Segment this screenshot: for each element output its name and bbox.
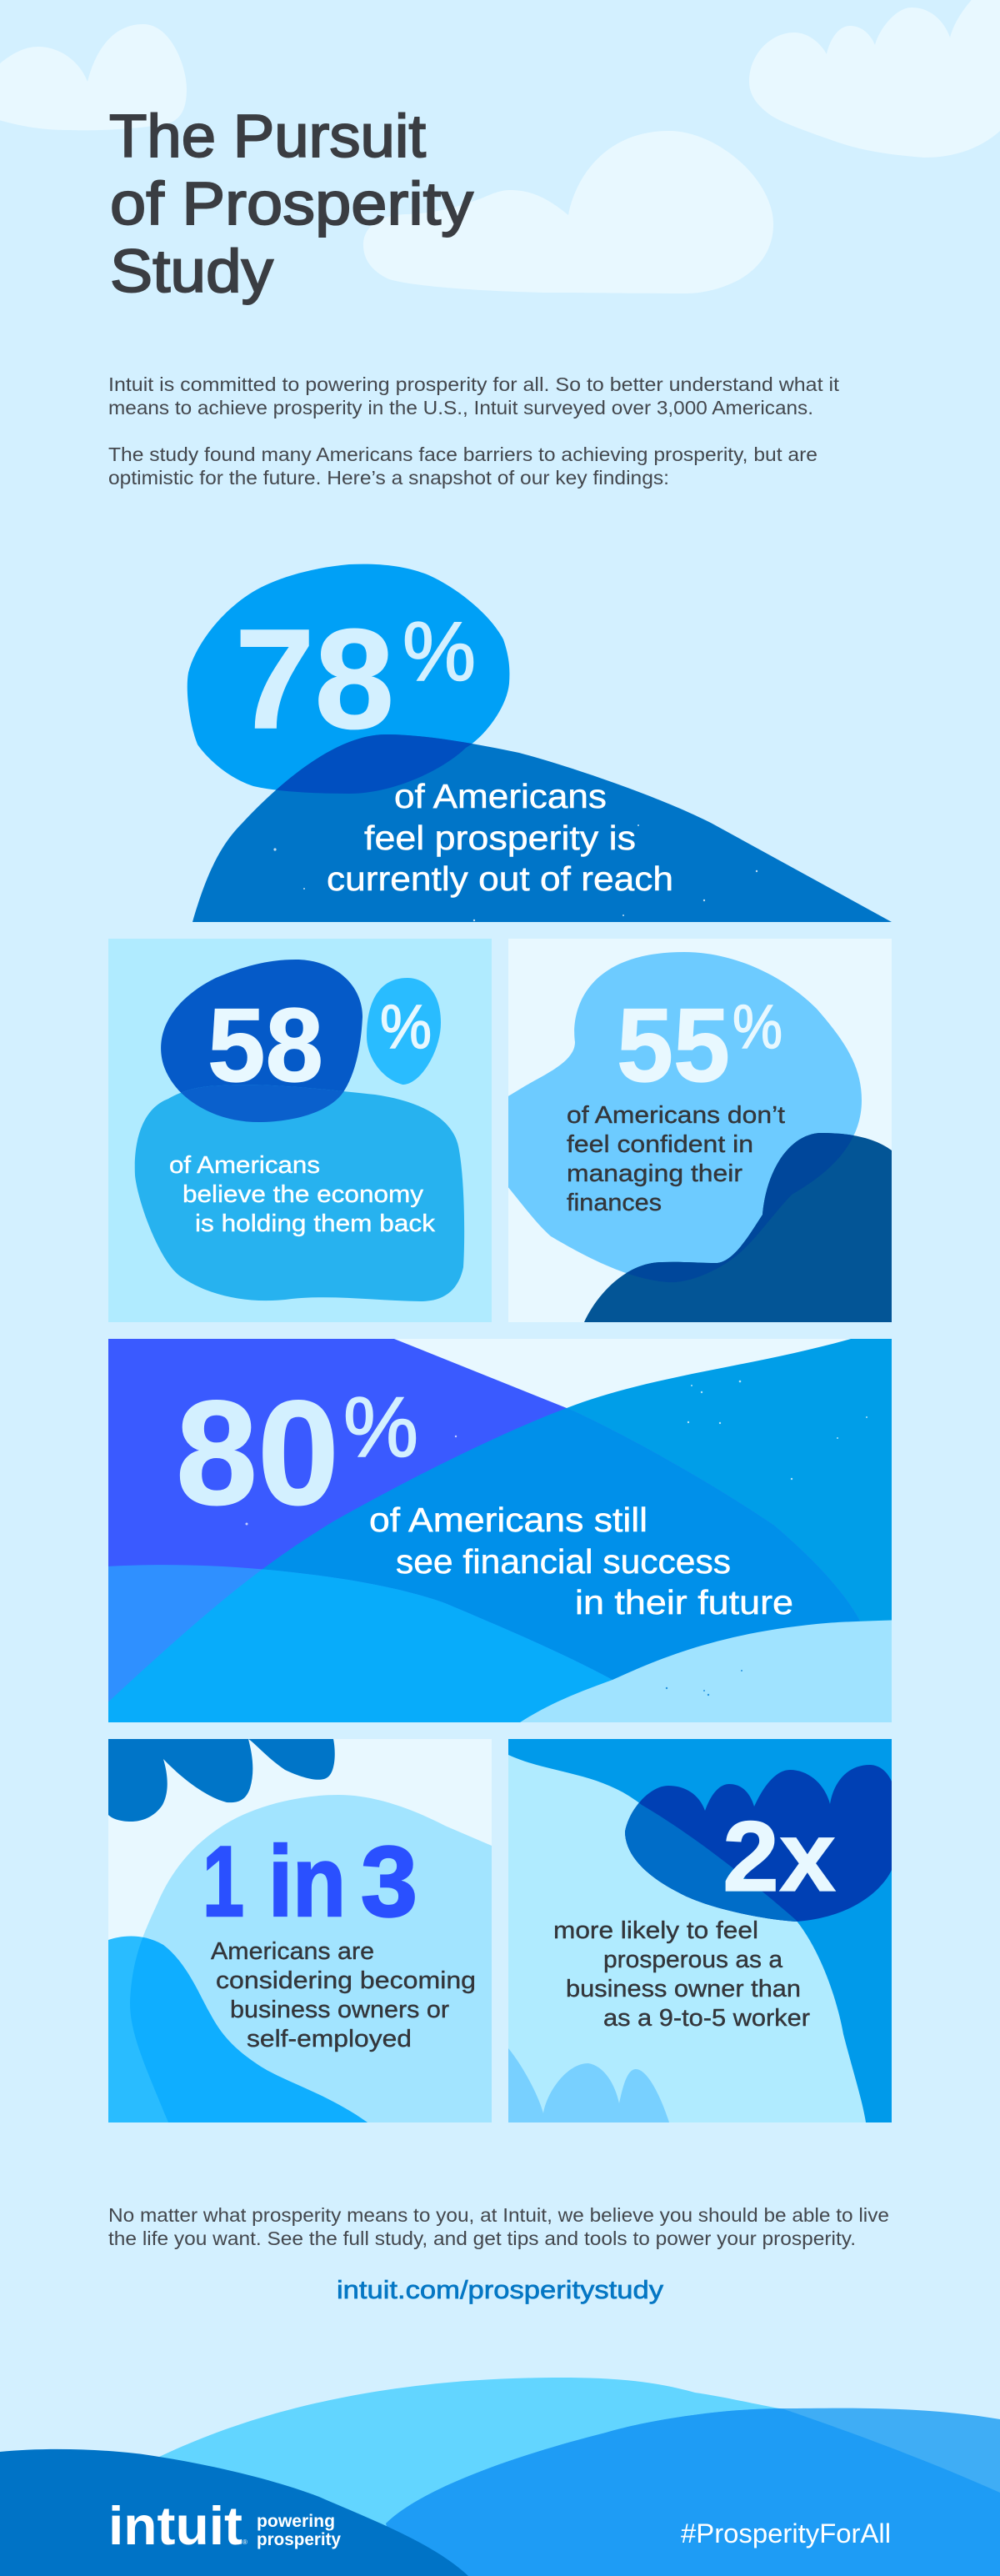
stat: 78% [235, 600, 476, 759]
intro text: Intuit is committed to powering prosperity for all. So to better understand what it [108, 373, 840, 395]
intro text: The study found many Americans face barriers to achieving prosperity, but are [108, 444, 818, 465]
small blob behind percent [367, 978, 441, 1085]
right hill [386, 2408, 1000, 2576]
closing text: the life you want. See the full study, and get tips and tools to power your prosperity. [108, 2228, 856, 2249]
stat: 80%: % [343, 1380, 418, 1475]
caption: 2x: as a 9-to-5 worker [603, 2005, 810, 2032]
stat: 2x: 2x [722, 1801, 836, 1912]
title: The Pursuit [109, 103, 426, 170]
light blob [492, 952, 862, 1282]
panel: 55 percent [508, 939, 892, 1322]
intro text [108, 373, 840, 489]
footer hills [0, 2378, 1000, 2576]
caption: 55: feel confident in [567, 1131, 753, 1158]
dark hill [0, 2449, 500, 2576]
caption: 80: in their future [575, 1583, 793, 1621]
title: of Prosperity [110, 171, 473, 238]
caption: 1 in 3 [211, 1938, 476, 2052]
caption: 80 [370, 1506, 792, 1615]
link: intuit.com/prosperitystudy [337, 2275, 664, 2304]
caption: 58: is holding them back [195, 1210, 436, 1237]
light hill [520, 1621, 892, 1722]
caption: 58: of Americans [169, 1152, 320, 1179]
stat: 58%: % [380, 992, 432, 1061]
panel: 1 in 3 [108, 1739, 492, 2122]
light wave [508, 1755, 866, 2122]
stat: 55%: % [732, 992, 782, 1061]
hill [192, 734, 892, 922]
closing text [108, 2204, 889, 2249]
stat: 78%: % [402, 605, 476, 699]
panel: 80 percent [108, 1339, 892, 1722]
stat: 1 in 3 [207, 1842, 415, 1918]
stat: 58% [210, 1004, 430, 1083]
title: Study [110, 238, 273, 305]
stat: 1 in 3: in [268, 1826, 346, 1937]
caption: 55 [567, 1102, 785, 1216]
intro text: means to achieve prosperity in the U.S., Intuit surveyed over 3,000 Americans. [108, 397, 813, 418]
closing text: No matter what prosperity means to you, at Intuit, we believe you should be able to live [108, 2204, 889, 2226]
stat: 55% [619, 1004, 782, 1083]
caption: 78: feel prosperity is [364, 819, 636, 857]
title [109, 103, 473, 305]
caption: 1 in 3: considering becoming [216, 1967, 476, 1994]
dark flower [625, 1765, 917, 1922]
caption: 55: of Americans don’t [567, 1102, 785, 1129]
purple hill [108, 1339, 860, 1621]
panel: 78 percent [187, 564, 892, 922]
dark wave [584, 1133, 892, 1322]
dark blob behind 58 [161, 960, 362, 1093]
panel: 58 percent [108, 939, 492, 1322]
stat: 58%: 58 [208, 988, 323, 1104]
caption: 58 [169, 1152, 436, 1237]
stat: 1 in 3: 3 [361, 1826, 418, 1937]
logo: intuit: ® [242, 2538, 248, 2546]
hashtag: #ProsperityForAll [681, 2518, 891, 2548]
caption: 2x: prosperous as a [603, 1947, 783, 1973]
intro text: optimistic for the future. Here’s a snapshot of our key findings: [108, 467, 669, 489]
tagline [257, 2512, 341, 2549]
caption: 1 in 3: business owners or [230, 1997, 449, 2023]
caption: 2x: business owner than [566, 1976, 801, 2002]
caption: 78: currently out of reach [327, 860, 673, 898]
caption: 2x: more likely to feel [553, 1917, 758, 1944]
stat: 80% [180, 1396, 417, 1506]
caption: 58: believe the economy [182, 1181, 424, 1208]
petals top left [108, 1739, 335, 1822]
tagline: prosperity [257, 2530, 341, 2549]
logo: intuit: intuit [108, 2495, 242, 2556]
panel: 2x [508, 1739, 892, 2122]
stat: 78%: 78 [235, 600, 394, 759]
caption: 80: of Americans still [369, 1501, 648, 1539]
large blob behind caption [135, 1085, 464, 1301]
caption: 1 in 3: self-employed [247, 2026, 412, 2052]
stat: 80%: 80 [176, 1370, 339, 1536]
light hill [67, 2378, 1000, 2576]
caption: 55: managing their [567, 1160, 742, 1187]
tagline: powering [257, 2512, 335, 2531]
clouds [0, 0, 1000, 293]
stat: 1 in 3: 1 [202, 1826, 244, 1937]
caption: 78 [327, 777, 673, 898]
caption: 80: see financial success [396, 1542, 731, 1581]
blue wave [108, 1936, 368, 2122]
caption: 78: of Americans [394, 777, 607, 815]
light blob [143, 1795, 492, 2122]
right hill [567, 1339, 892, 1621]
left hill [108, 1565, 612, 1702]
blob behind 78 [188, 564, 509, 794]
caption: 1 in 3: Americans are [211, 1938, 374, 1965]
caption: 2x [553, 1917, 810, 2032]
logo: intuit [108, 2495, 341, 2556]
caption: 55: finances [567, 1190, 662, 1216]
stat: 55%: 55 [617, 988, 730, 1104]
petals bottom left [508, 2048, 669, 2122]
